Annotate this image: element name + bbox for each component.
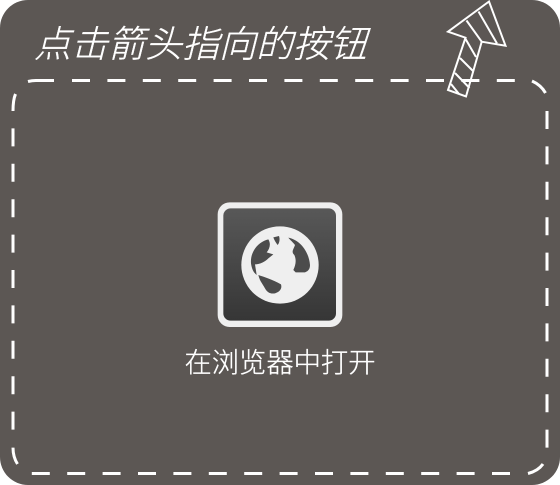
icon: browser globe app button: [218, 202, 342, 327]
icon: striped arrow pointing up-right: [448, 2, 506, 96]
title: 点击箭头指向的按钮: [34, 24, 371, 65]
icon label: 在浏览器中打开: [184, 347, 376, 378]
dashed drop area border: [13, 80, 547, 474]
